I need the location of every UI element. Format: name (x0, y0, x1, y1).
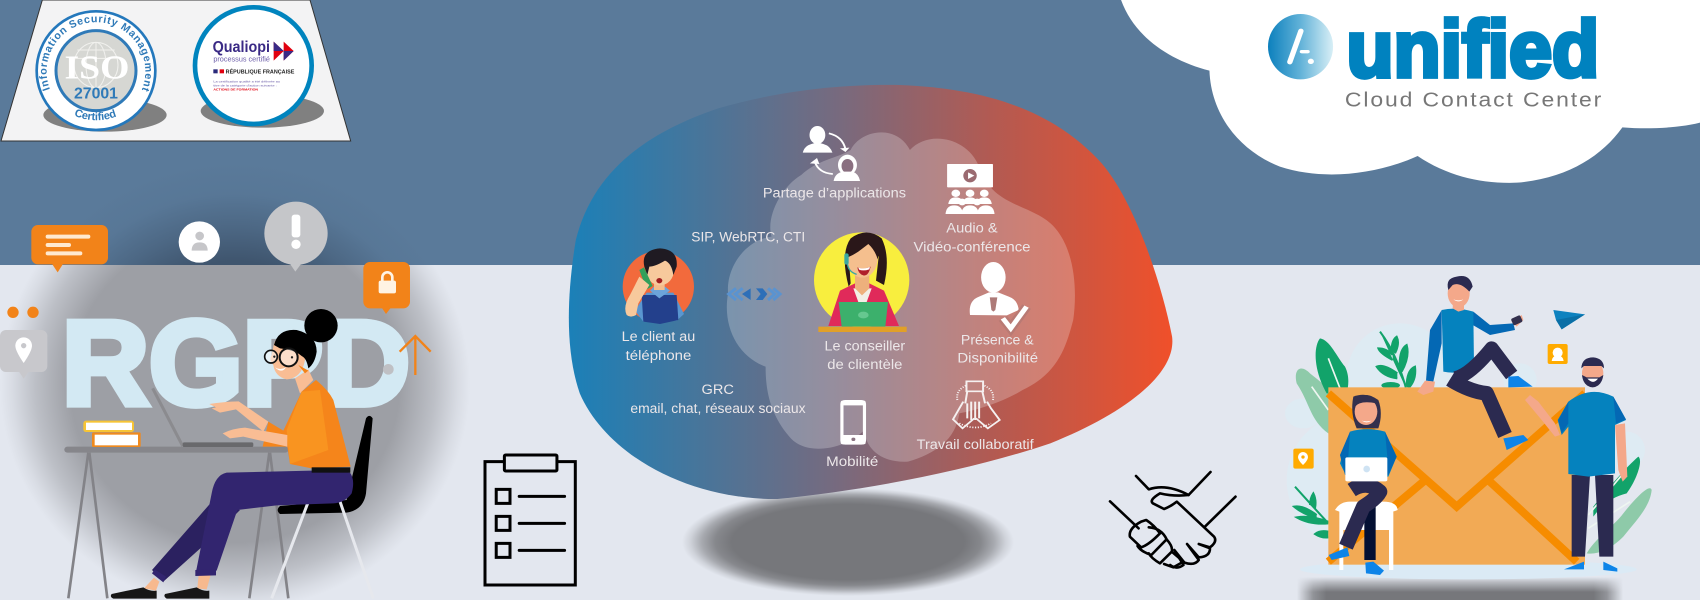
man sitting on envelope (1417, 276, 1533, 450)
ISO 27001 badge (35, 10, 157, 132)
logo wordmark: unified: unified (1346, 5, 1599, 94)
head (265, 309, 338, 379)
belt (312, 467, 350, 473)
icon: application sharing people (803, 126, 860, 181)
inner translucent cloud (727, 132, 1075, 462)
team envelope illustration (1285, 276, 1652, 579)
ISO 27001 badge: ISO (64, 50, 129, 87)
trapezoid plaque (1, 0, 351, 141)
arm front (223, 428, 287, 447)
badge shadow ISO (43, 98, 167, 132)
logo mark (1268, 14, 1333, 79)
white cloud (1121, 0, 1700, 183)
cloud with logo (1121, 0, 1700, 183)
label: Le conseiller de clientèle: de clientèle (827, 357, 902, 373)
team envelope shadow (1297, 577, 1623, 600)
Qualiopi badge (195, 7, 312, 124)
Qualiopi badge: La certification qualité a été délivrée au (213, 79, 280, 83)
label: Le conseiller de clientèle: Le conseiller (825, 338, 905, 354)
left leaves (1294, 332, 1415, 538)
ISO 27001 badge: Information Security Management (39, 15, 151, 92)
small grey dot (383, 364, 394, 375)
icon: location pin bubble (0, 330, 47, 379)
label: Présence & Disponibilité (957, 332, 1038, 366)
ISO 27001 badge: 27001 (74, 86, 118, 103)
label: Audio & Vidéo-conférence: Vidéo-conférence (913, 240, 1031, 255)
central platform diagram (569, 85, 1172, 499)
label: Audio & Vidéo-conférence (913, 221, 1031, 255)
logo tagline: Cloud Contact Center (1345, 89, 1601, 111)
client and agent characters (623, 232, 909, 332)
icon: orange lock bubble (363, 262, 410, 314)
neck (295, 369, 313, 393)
ground ellipse (1300, 559, 1637, 579)
agent character (814, 232, 909, 332)
label: GRC: GRC (702, 382, 734, 398)
icon: handshake (1110, 472, 1236, 567)
icon: user avatar (179, 221, 220, 263)
books (83, 421, 141, 447)
central shadow (680, 488, 1016, 598)
icon: paper plane (1553, 310, 1585, 329)
label: Le conseiller de clientèle (825, 338, 905, 373)
shirt (263, 380, 351, 468)
label: Audio & Vidéo-conférence: Audio & (946, 221, 998, 236)
pale background shapes (1285, 323, 1645, 547)
chair (272, 416, 373, 598)
background: floor (0, 265, 1700, 600)
envelope (1328, 387, 1585, 565)
icon: presence businessman with check (970, 262, 1027, 328)
label: Le client au téléphone (622, 329, 695, 364)
shadow behind RGPD illustration (0, 155, 470, 265)
right leaves (1587, 457, 1652, 554)
grey glow on the floor (0, 265, 470, 600)
label: Partage d'applications: Partage d’applications (763, 186, 906, 201)
icon: contact tag (1548, 344, 1568, 364)
RGPD big letters: RGPD (62, 297, 410, 431)
background: top band (0, 0, 1700, 265)
icon: orange chat bubble (31, 225, 108, 272)
label: Présence & Disponibilité: Présence & (961, 332, 1034, 348)
orange dots (7, 307, 39, 318)
woman on stool (1329, 395, 1398, 575)
bearded man standing (1525, 357, 1627, 572)
icon: checklist clipboard (485, 455, 575, 585)
RGPD illustration (0, 297, 431, 599)
double arrows (729, 288, 780, 300)
label: Le client au téléphone: téléphone (626, 348, 691, 364)
Qualiopi badge: ACTIONS DE FORMATION (213, 87, 258, 91)
icon: video conference (946, 164, 995, 214)
icon: orange arrow up (400, 336, 431, 375)
Qualiopi badge: Qualiopi (213, 39, 270, 56)
ISO 27001 badge: Certified (75, 109, 116, 120)
label: SIP, WebRTC, CTI: SIP, WebRTC, CTI (691, 230, 805, 245)
label: Travail collaboratif: Travail collaboratif (917, 437, 1034, 453)
Qualiopi badge: RÉPUBLIQUE FRANÇAISE (226, 68, 295, 76)
arm back (209, 401, 268, 432)
certification panel (0, 0, 410, 314)
label: channels: email, chat, réseaux sociaux (630, 401, 806, 417)
feet and shoes (111, 569, 216, 599)
gradient blob (569, 85, 1172, 499)
label: Présence & Disponibilité: Disponibilité (957, 351, 1038, 366)
Qualiopi badge: titre de la catégorie d'action suivante : (213, 83, 277, 87)
badge shadow Qualiopi (201, 94, 324, 128)
label: Le client au téléphone: Le client au (622, 329, 695, 345)
icon: alert bubble (264, 202, 328, 272)
sleeve shade (287, 390, 328, 464)
icon: location tag (1293, 449, 1314, 469)
laptop (153, 388, 253, 447)
icon: collaborative hands (953, 381, 1000, 428)
back leg (152, 500, 240, 582)
front leg and hips (196, 471, 353, 572)
client character (623, 248, 694, 324)
desk (64, 447, 288, 598)
label: Mobilité: Mobilité (826, 454, 878, 470)
icon: mobile phone (841, 401, 866, 444)
Qualiopi badge: processus certifié (213, 56, 270, 63)
